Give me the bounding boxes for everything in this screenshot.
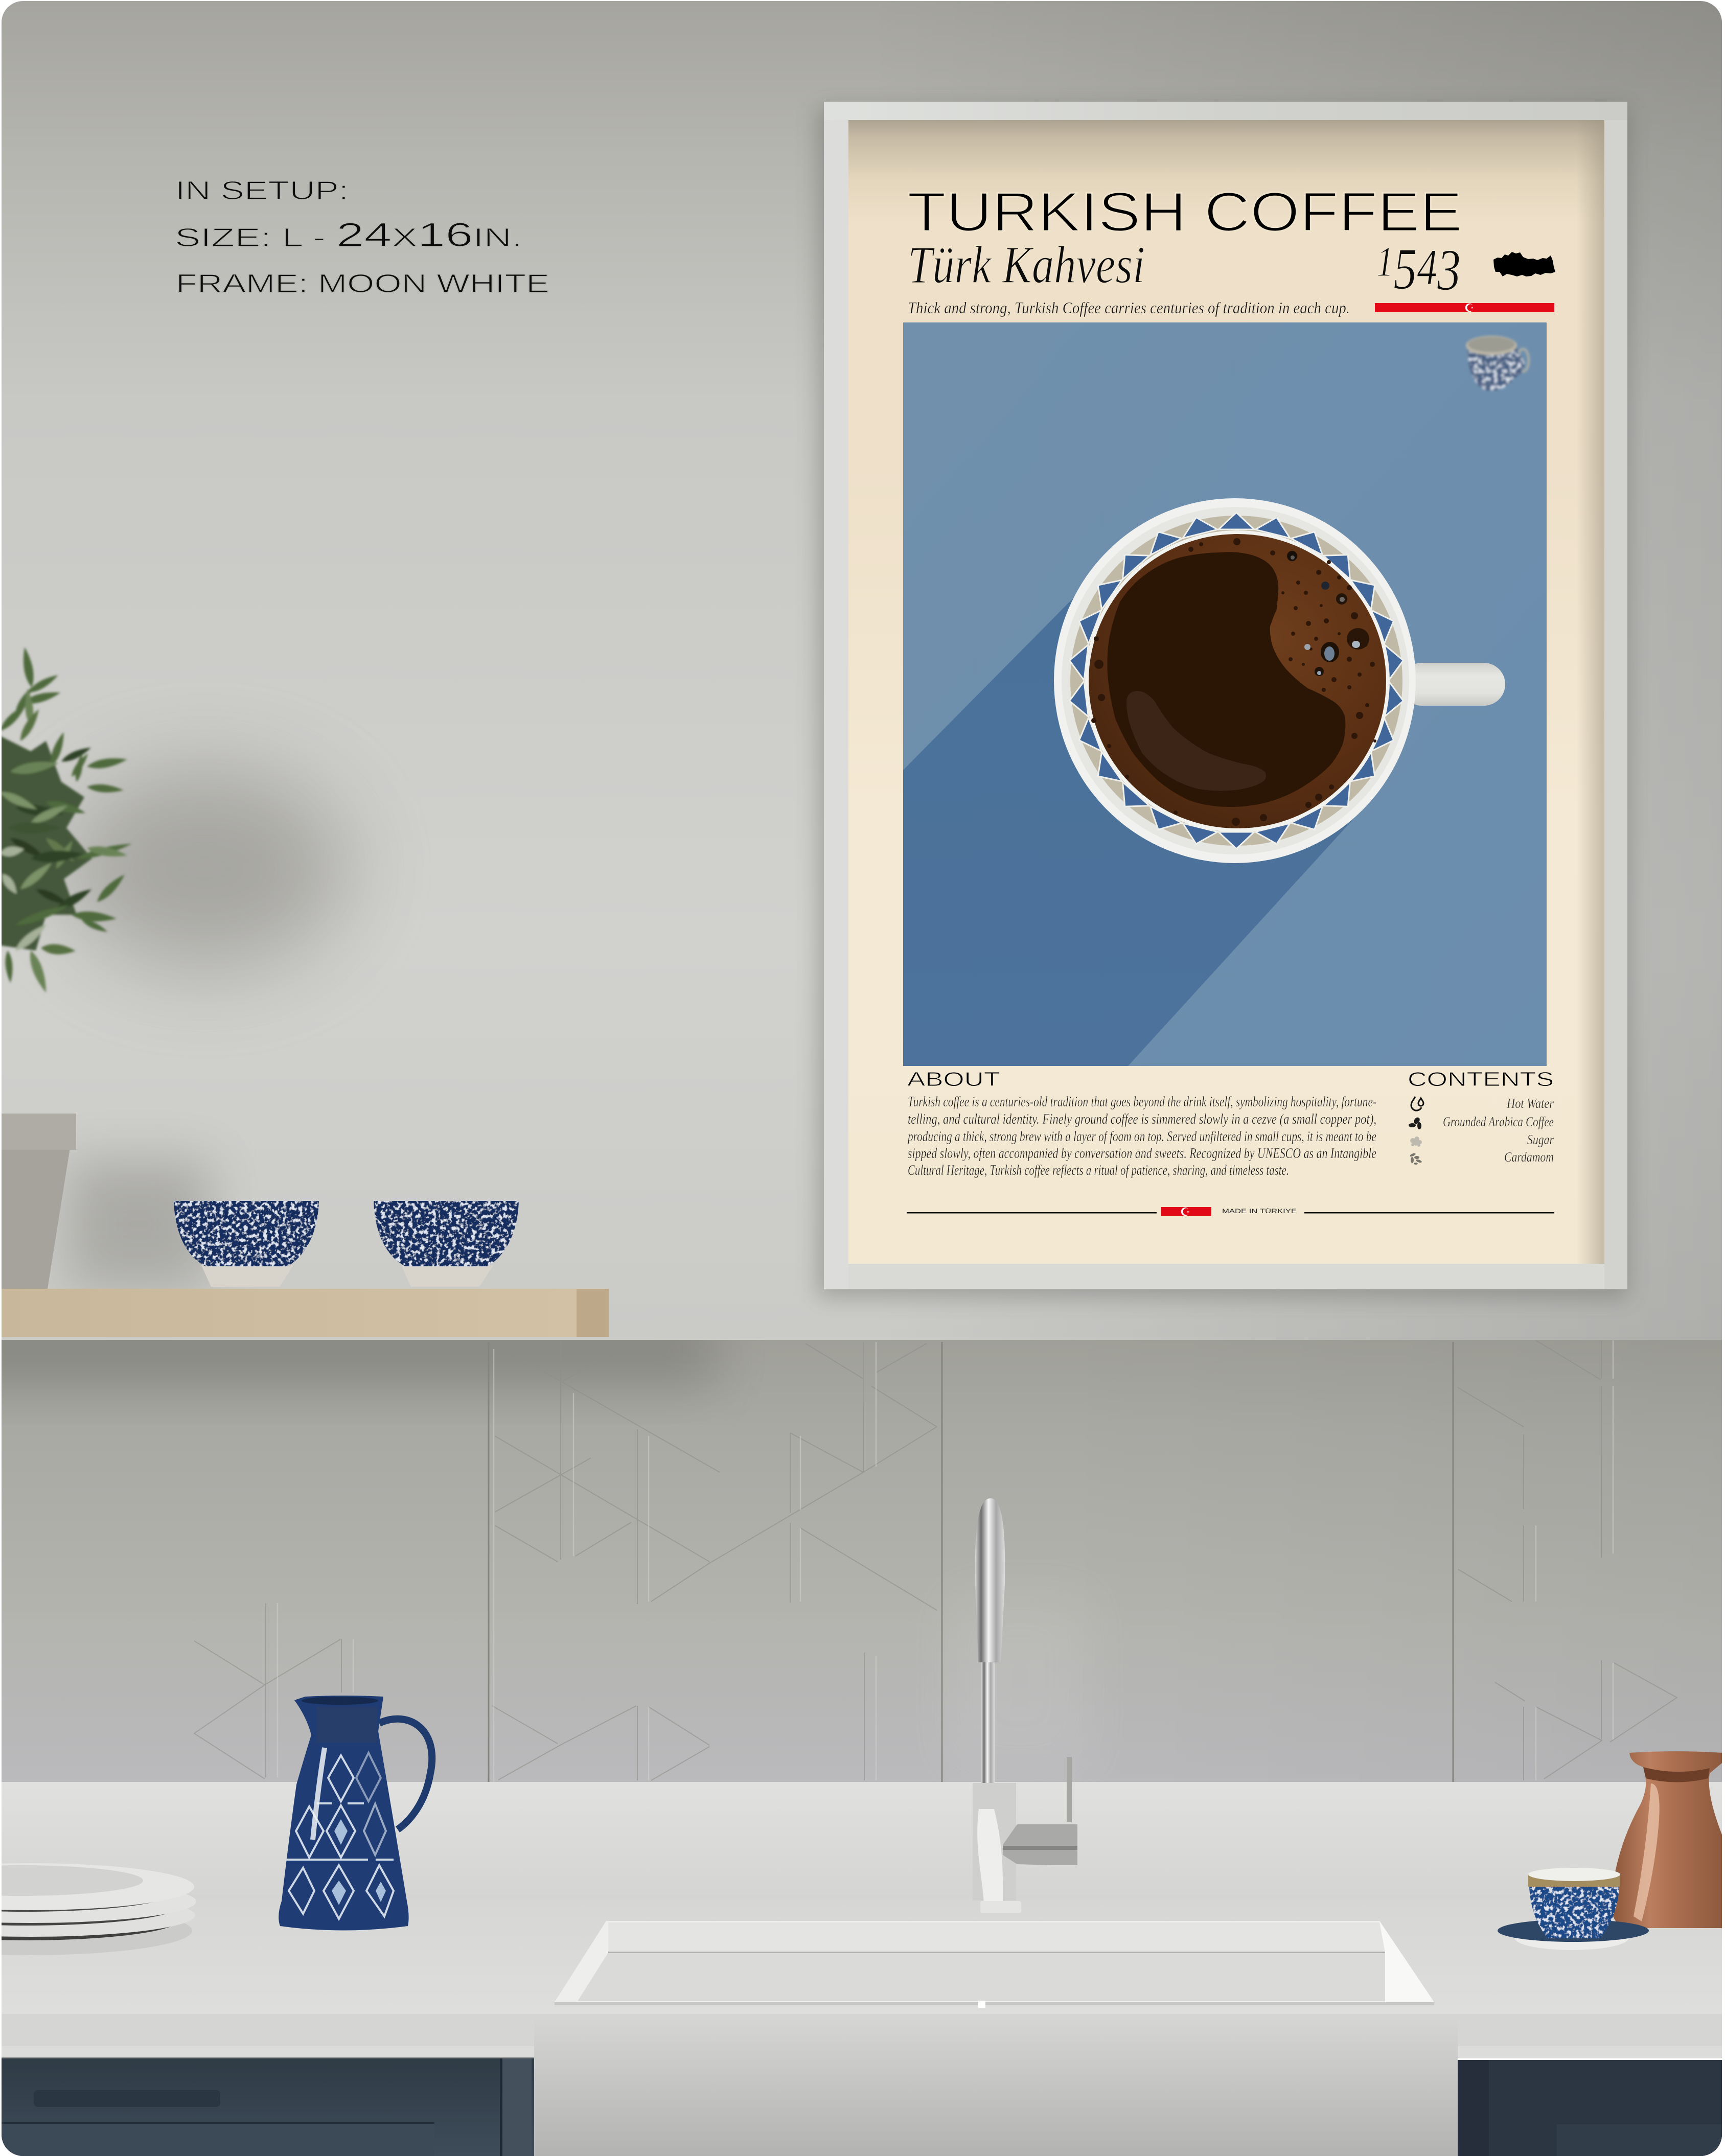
contents list: Cardamom bbox=[1504, 1149, 1554, 1165]
right cabinet bbox=[1458, 2060, 1725, 2156]
coffee cup from above bbox=[1054, 498, 1505, 863]
tiled backsplash wall bbox=[0, 1318, 1725, 1782]
patterned band bbox=[1067, 513, 1406, 849]
poster bbox=[848, 120, 1604, 1264]
title: TURKISH COFFEE bbox=[907, 181, 1462, 243]
coffee crema bbox=[1085, 530, 1390, 832]
contents list: Hot Water bbox=[1506, 1096, 1554, 1111]
icon: coffee beans bbox=[1409, 1116, 1421, 1129]
year: 1 bbox=[1376, 238, 1393, 286]
plates bbox=[0, 1863, 196, 1955]
copper pot bbox=[1611, 1751, 1722, 1928]
countertop bbox=[0, 1898, 1725, 2059]
coffee surface bbox=[1107, 552, 1345, 807]
contents list bbox=[1443, 1096, 1554, 1165]
contents heading: CONTENTS bbox=[1408, 1069, 1554, 1091]
about text bbox=[907, 1094, 1376, 1178]
flower pot bbox=[0, 1114, 76, 1289]
plant shadow on wall bbox=[61, 767, 348, 971]
faucet wall glow bbox=[951, 1594, 1089, 1768]
left cabinet bbox=[0, 2058, 534, 2156]
setup text: SIZE: L - 24 X16 IN. bbox=[175, 216, 522, 253]
about text: producing a thick, strong brew with a layer of foam on top. Served unfiltered in small cups, it is meant to be bbox=[907, 1129, 1376, 1145]
contents list: Grounded Arabica Coffee bbox=[1443, 1114, 1554, 1129]
year: 3 bbox=[1437, 238, 1461, 303]
bowl left bbox=[174, 1201, 319, 1287]
jug handle bbox=[379, 1719, 432, 1829]
small cup icon bbox=[1466, 336, 1529, 390]
icon: map of Turkey bbox=[1493, 252, 1555, 276]
about text: sipped slowly, often accompanied by conversation and sweets. Recognized by UNESCO as an Intangible bbox=[908, 1146, 1376, 1162]
frame shadow bbox=[818, 108, 1627, 1297]
cup rim bbox=[1054, 498, 1416, 863]
plant bbox=[0, 646, 133, 994]
about text: Turkish coffee is a centuries-old tradition that goes beyond the drink itself, symbolizing hospitality, fortune- bbox=[908, 1094, 1376, 1110]
contents list: Sugar bbox=[1527, 1132, 1554, 1147]
jug diamonds bbox=[286, 1753, 394, 1919]
about text: Cultural Heritage, Turkish coffee reflects a ritual of patience, sharing, and timeless taste. bbox=[908, 1163, 1289, 1178]
faucet bbox=[973, 1498, 1077, 1913]
footer rule and flag bbox=[907, 1207, 1554, 1216]
setup text bbox=[175, 176, 549, 298]
shelf bbox=[0, 1289, 609, 1337]
jug bbox=[279, 1696, 432, 1931]
setup text: IN SETUP: bbox=[175, 176, 349, 205]
sink basin bbox=[555, 1921, 1434, 2008]
flag bar bbox=[1375, 303, 1554, 312]
sink apron bbox=[534, 2019, 1458, 2156]
icon: water drops bbox=[1411, 1097, 1423, 1110]
backsplash bbox=[0, 1782, 1725, 1902]
coffee highlight bbox=[1126, 691, 1266, 791]
jug body bbox=[279, 1696, 409, 1931]
tagline: Thick and strong, Turkish Coffee carries centuries of tradition in each cup. bbox=[908, 298, 1350, 317]
about text: telling, and cultural identity. Finely ground coffee is simmered slowly in a cezve (a small copper pot), bbox=[908, 1111, 1376, 1127]
poster paper bbox=[848, 120, 1604, 1264]
about heading: ABOUT bbox=[907, 1069, 1000, 1091]
year: 5 bbox=[1393, 237, 1417, 302]
turkish subtitle: Türk Kahvesi bbox=[908, 236, 1145, 294]
foam specks bbox=[1091, 538, 1376, 826]
setup text: FRAME: MOON WHITE bbox=[176, 269, 549, 298]
made in label: MADE IN TÜRKIYE bbox=[1222, 1208, 1297, 1215]
year: 4 bbox=[1417, 239, 1437, 295]
coffee cup and saucer bbox=[1498, 1868, 1649, 1950]
bowl right bbox=[374, 1201, 519, 1287]
picture frame bbox=[824, 102, 1627, 1289]
cup shadow bbox=[903, 588, 1352, 1066]
plant pot shadow bbox=[66, 1160, 210, 1289]
cup handle bbox=[1400, 663, 1505, 706]
bubbles bbox=[1287, 551, 1369, 676]
icon: sugar bbox=[1410, 1137, 1422, 1147]
wall bbox=[0, 0, 1725, 1344]
icon: cardamom bbox=[1410, 1152, 1422, 1165]
illustration panel bbox=[903, 322, 1547, 1066]
